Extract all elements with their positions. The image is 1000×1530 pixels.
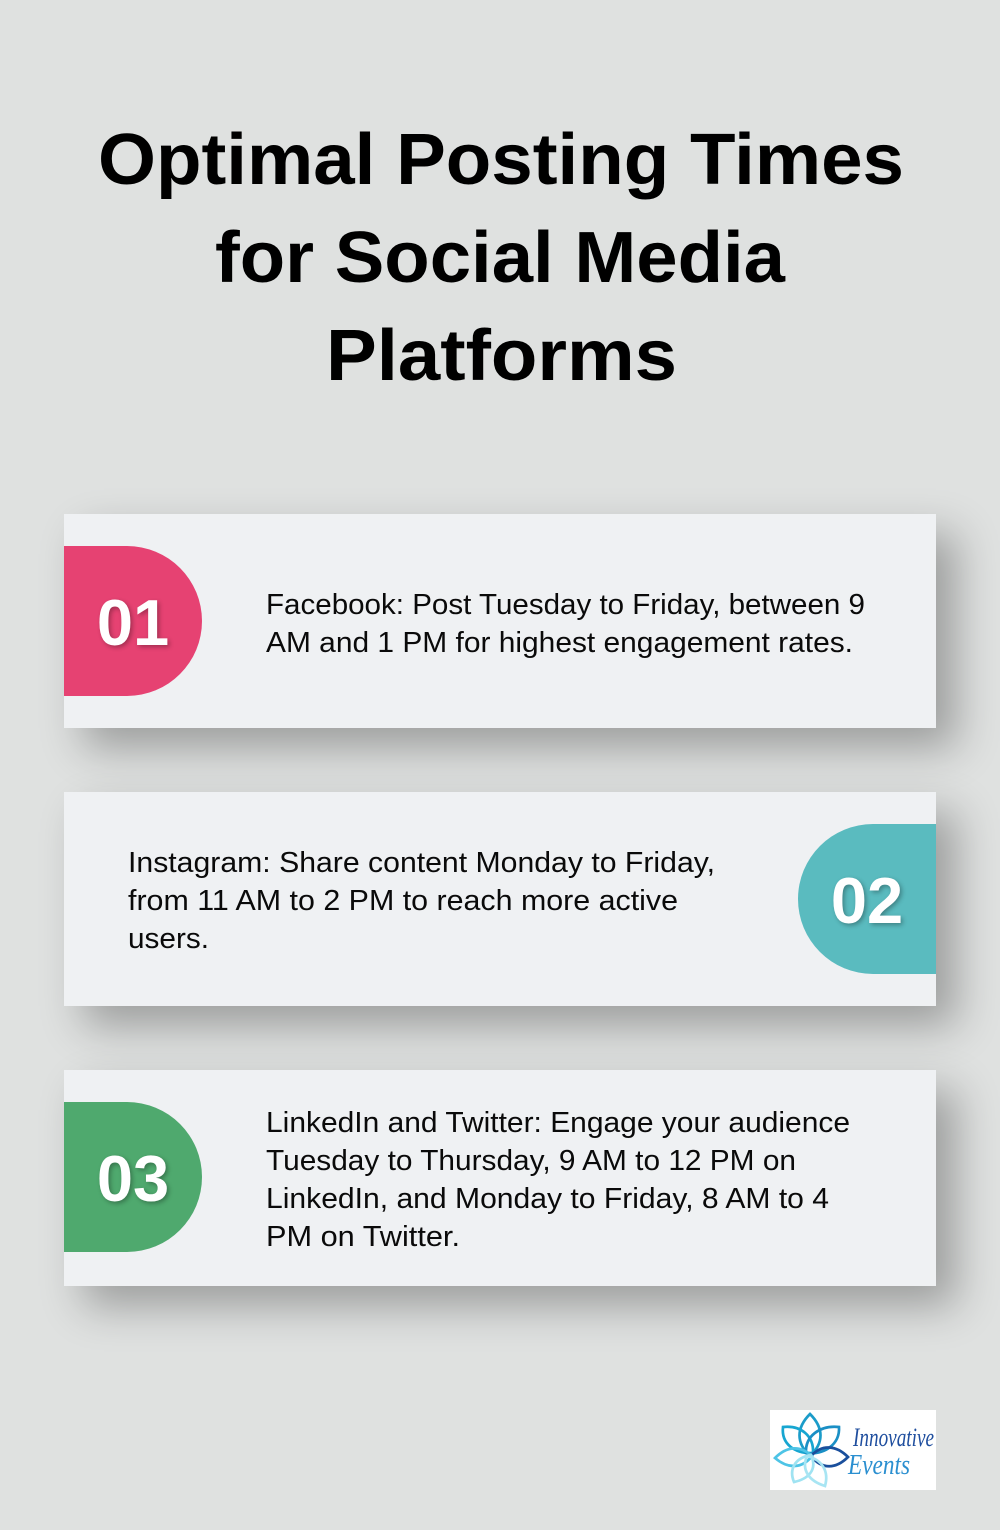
text: Facebook bbox=[266, 589, 865, 659]
badge 01: 01 bbox=[97, 586, 169, 659]
title: for Social Media bbox=[215, 218, 786, 298]
text: LinkedIn and Twitter bbox=[266, 1107, 850, 1253]
text: LinkedIn and Twitter: LinkedIn, and Monday to Friday, 8 AM to 4 bbox=[266, 1183, 829, 1215]
logo: Innovative Events: Innovative bbox=[852, 1423, 934, 1452]
badge 02: 02 bbox=[831, 864, 903, 937]
badge 03 bbox=[64, 1102, 202, 1252]
text: Facebook: AM and 1 PM for highest engagement rates. bbox=[266, 627, 853, 659]
text: Instagram: from 11 AM to 2 PM to reach more active bbox=[128, 885, 678, 917]
badge 02 bbox=[798, 824, 936, 974]
logo: Innovative Events bbox=[770, 1410, 936, 1490]
badge 01 bbox=[64, 546, 202, 696]
text: Instagram: users. bbox=[128, 923, 209, 955]
text: LinkedIn and Twitter: LinkedIn and Twitter: Engage your audience bbox=[266, 1107, 850, 1139]
text: Instagram: Instagram: Share content Monday to Friday, bbox=[128, 847, 715, 879]
title: Platforms bbox=[326, 316, 677, 396]
panel: LinkedIn and Twitter card bbox=[64, 1070, 936, 1286]
title bbox=[98, 120, 904, 396]
logo: Innovative Events: Events bbox=[847, 1450, 910, 1481]
badge 03: 03 bbox=[97, 1142, 169, 1215]
text: LinkedIn and Twitter: PM on Twitter. bbox=[266, 1221, 460, 1253]
text: Instagram bbox=[128, 847, 715, 955]
text: Facebook: Facebook: Post Tuesday to Friday, between 9 bbox=[266, 589, 865, 621]
panel: Facebook card bbox=[64, 514, 936, 728]
text: LinkedIn and Twitter: Tuesday to Thursday, 9 AM to 12 PM on bbox=[266, 1145, 796, 1177]
title: Optimal Posting Times bbox=[98, 120, 904, 200]
panel: Instagram card bbox=[64, 792, 936, 1006]
